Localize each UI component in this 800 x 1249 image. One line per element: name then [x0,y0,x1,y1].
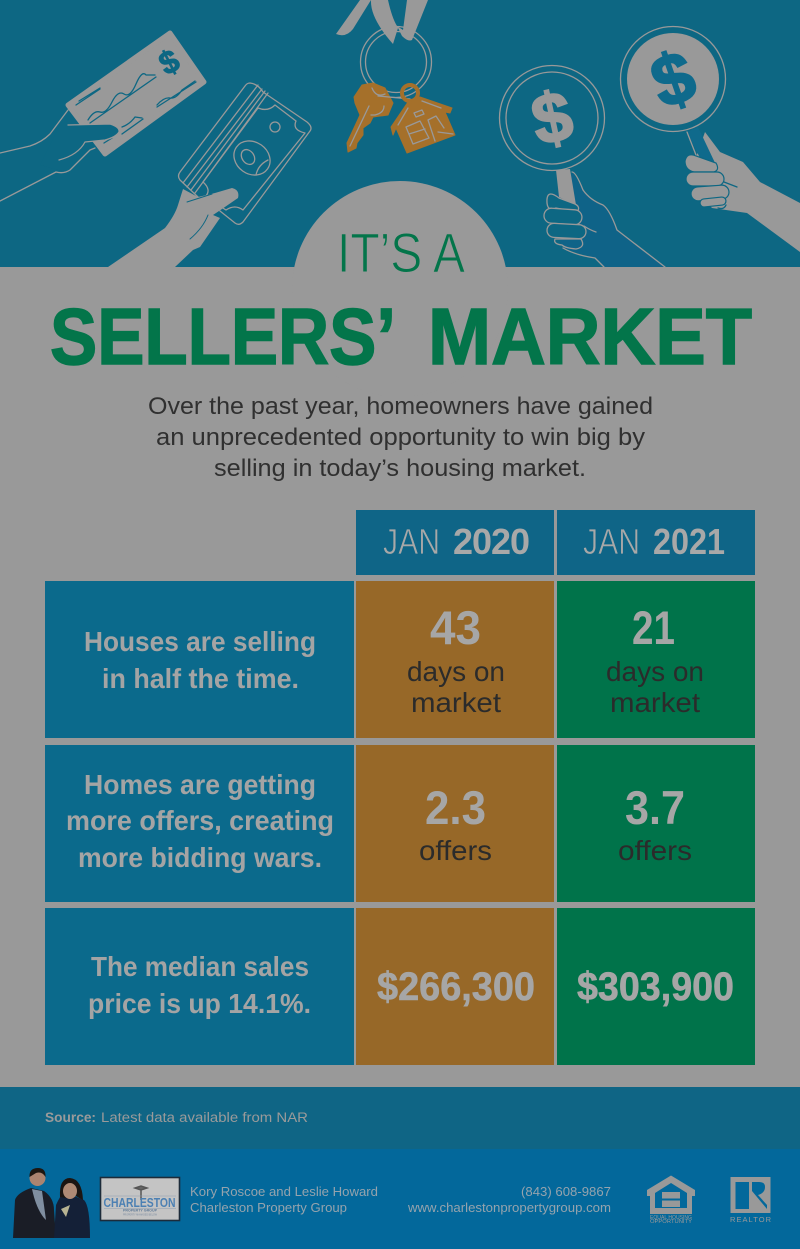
row: median price: The median sales [91,951,309,982]
logo: Charleston Property Group [100,1178,180,1220]
row: days on market: 21 [632,601,675,654]
icon: realtor mark: REALTOR [730,1215,772,1224]
icon: hand holding check [0,33,204,201]
row: offers: more offers, creating [66,805,334,836]
column header: Jan 2021: 2021 [653,521,725,562]
row: median price [45,908,755,1065]
column header: Jan 2021 [557,510,755,575]
row: days on market: market [610,687,700,718]
row: offers: more bidding wars. [78,842,322,873]
row: median price: price is up 14.1%. [88,988,311,1019]
row: offers: offers [419,835,492,866]
column header: Jan 2020: 2020 [453,521,530,562]
icon: left paddle in hand: $ [525,76,579,160]
source band: Latest data available from NAR [101,1110,308,1125]
row: offers: offers [618,835,692,866]
intro text: Over the past year, homeowners have gained [148,393,653,420]
icon: realtor mark [730,1177,772,1224]
row: days on market: days on [606,656,704,687]
agent names: Kory Roscoe and Leslie Howard [190,1184,378,1199]
icon: left paddle in hand [500,66,665,267]
icon: right paddle in hand [620,26,800,252]
row: days on market: Houses are selling [84,626,316,657]
arch behind title [292,181,508,397]
intro text: an unprecedented opportunity to win big by [156,424,645,451]
row: offers: Homes are getting [84,769,316,800]
panel: header illustration [0,0,800,397]
heading: Sellers' Market [50,292,752,381]
table: market comparison [45,510,755,1065]
row: days on market: days on [407,656,505,687]
icon: hand holding check: $ [153,42,185,82]
source band: Source: [45,1110,96,1125]
row: offers: 2.3 [425,781,486,834]
column header: Jan 2021: JAN [583,521,640,562]
logo: Charleston Property Group: PROPERTY GROUP [123,1208,157,1212]
source band [0,1087,800,1149]
photo: agents [13,1168,90,1238]
row: median price: $266,300 [377,965,535,1009]
agent names [190,1184,378,1215]
heading: It's a: IT’S A [337,221,466,284]
row: offers [45,745,755,902]
intro text [148,393,653,482]
icon: hand holding cash [108,82,312,267]
row: offers: 3.7 [625,781,685,834]
intro text: selling in today’s housing market. [214,455,586,482]
icon: right paddle in hand: $ [641,36,705,124]
column header: Jan 2020: JAN [383,521,440,562]
icon: equal housing opportunity: OPPORTUNITY [650,1219,693,1225]
contact details: www.charlestonpropertygroup.com [407,1200,611,1215]
icon: equal housing opportunity [647,1176,695,1225]
row: days on market: 43 [430,601,481,654]
logo: Charleston Property Group: CHARLESTON [104,1196,176,1210]
icon: hand holding keys [336,0,455,153]
contact details [407,1184,611,1215]
row: median price: $303,900 [577,965,734,1009]
icon: equal housing opportunity: EQUAL HOUSING [650,1215,692,1221]
row: days on market [45,581,755,738]
heading: Sellers' Market: MARKET [428,292,752,381]
contact details: (843) 608-9867 [521,1184,611,1199]
row: days on market: market [411,687,501,718]
agent names: Charleston Property Group [190,1200,347,1215]
panel: footer [0,1149,800,1249]
column header: Jan 2020 [356,510,554,575]
logo: Charleston Property Group: PROPERTY MANAGED BELOW [123,1212,157,1216]
row: days on market: in half the time. [102,663,299,694]
heading: Sellers' Market: SELLERS’ [50,292,396,381]
